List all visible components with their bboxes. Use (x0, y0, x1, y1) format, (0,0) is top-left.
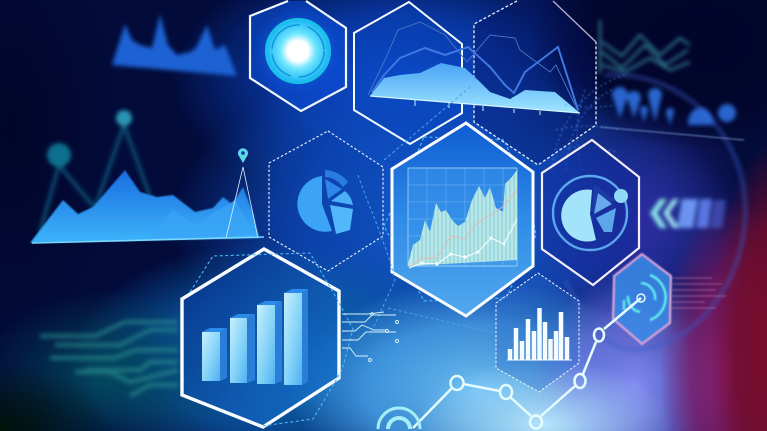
blurred baseline: right (600, 127, 744, 140)
bar 3 (257, 301, 282, 384)
bar 4 (284, 289, 308, 385)
bar 1 (202, 328, 227, 381)
dashed cyan outline behind bar chart (190, 253, 353, 426)
wireframe globe: right (552, 75, 745, 350)
line charts spanning hexagons (368, 22, 578, 110)
dashed hexagon: line chart (474, 1, 596, 165)
blurred chevron arrows: right (650, 199, 726, 228)
blurred teal gauge: bottom (378, 408, 420, 429)
icon: pie chart (297, 170, 353, 234)
bar 2 (230, 314, 255, 383)
dashed hexagon: bar histogram (496, 273, 579, 392)
hexagon: area chart (354, 2, 462, 144)
mountain chart: left (30, 110, 264, 243)
line chart with nodes: bottom (413, 294, 645, 428)
central hexagon: bar and line chart (392, 123, 533, 316)
area chart spanning hexagons (370, 63, 580, 115)
icon: pie segments (561, 184, 628, 242)
blurred pin chart: right (612, 87, 736, 125)
circuit lines: center (342, 312, 398, 362)
dashed connector lines (358, 87, 494, 335)
hexagon: big 3D bar chart (182, 249, 339, 427)
icon: map pin (238, 148, 248, 163)
hexagon: radar pie (542, 140, 639, 285)
dashed cyan hexagon behind central chart (384, 137, 536, 301)
blurred pin lines (40, 110, 155, 232)
blurred circuit lines: bottom left (40, 322, 178, 396)
hexagon: small blurred gauge (613, 254, 671, 344)
blurred pink data lines: right (672, 278, 726, 308)
hexagon: glowing radial dial (250, 1, 346, 111)
blurred line chart: top right (600, 20, 690, 73)
dashed hexagon: pie chart (269, 131, 383, 271)
blurred chart: top left (112, 14, 237, 76)
